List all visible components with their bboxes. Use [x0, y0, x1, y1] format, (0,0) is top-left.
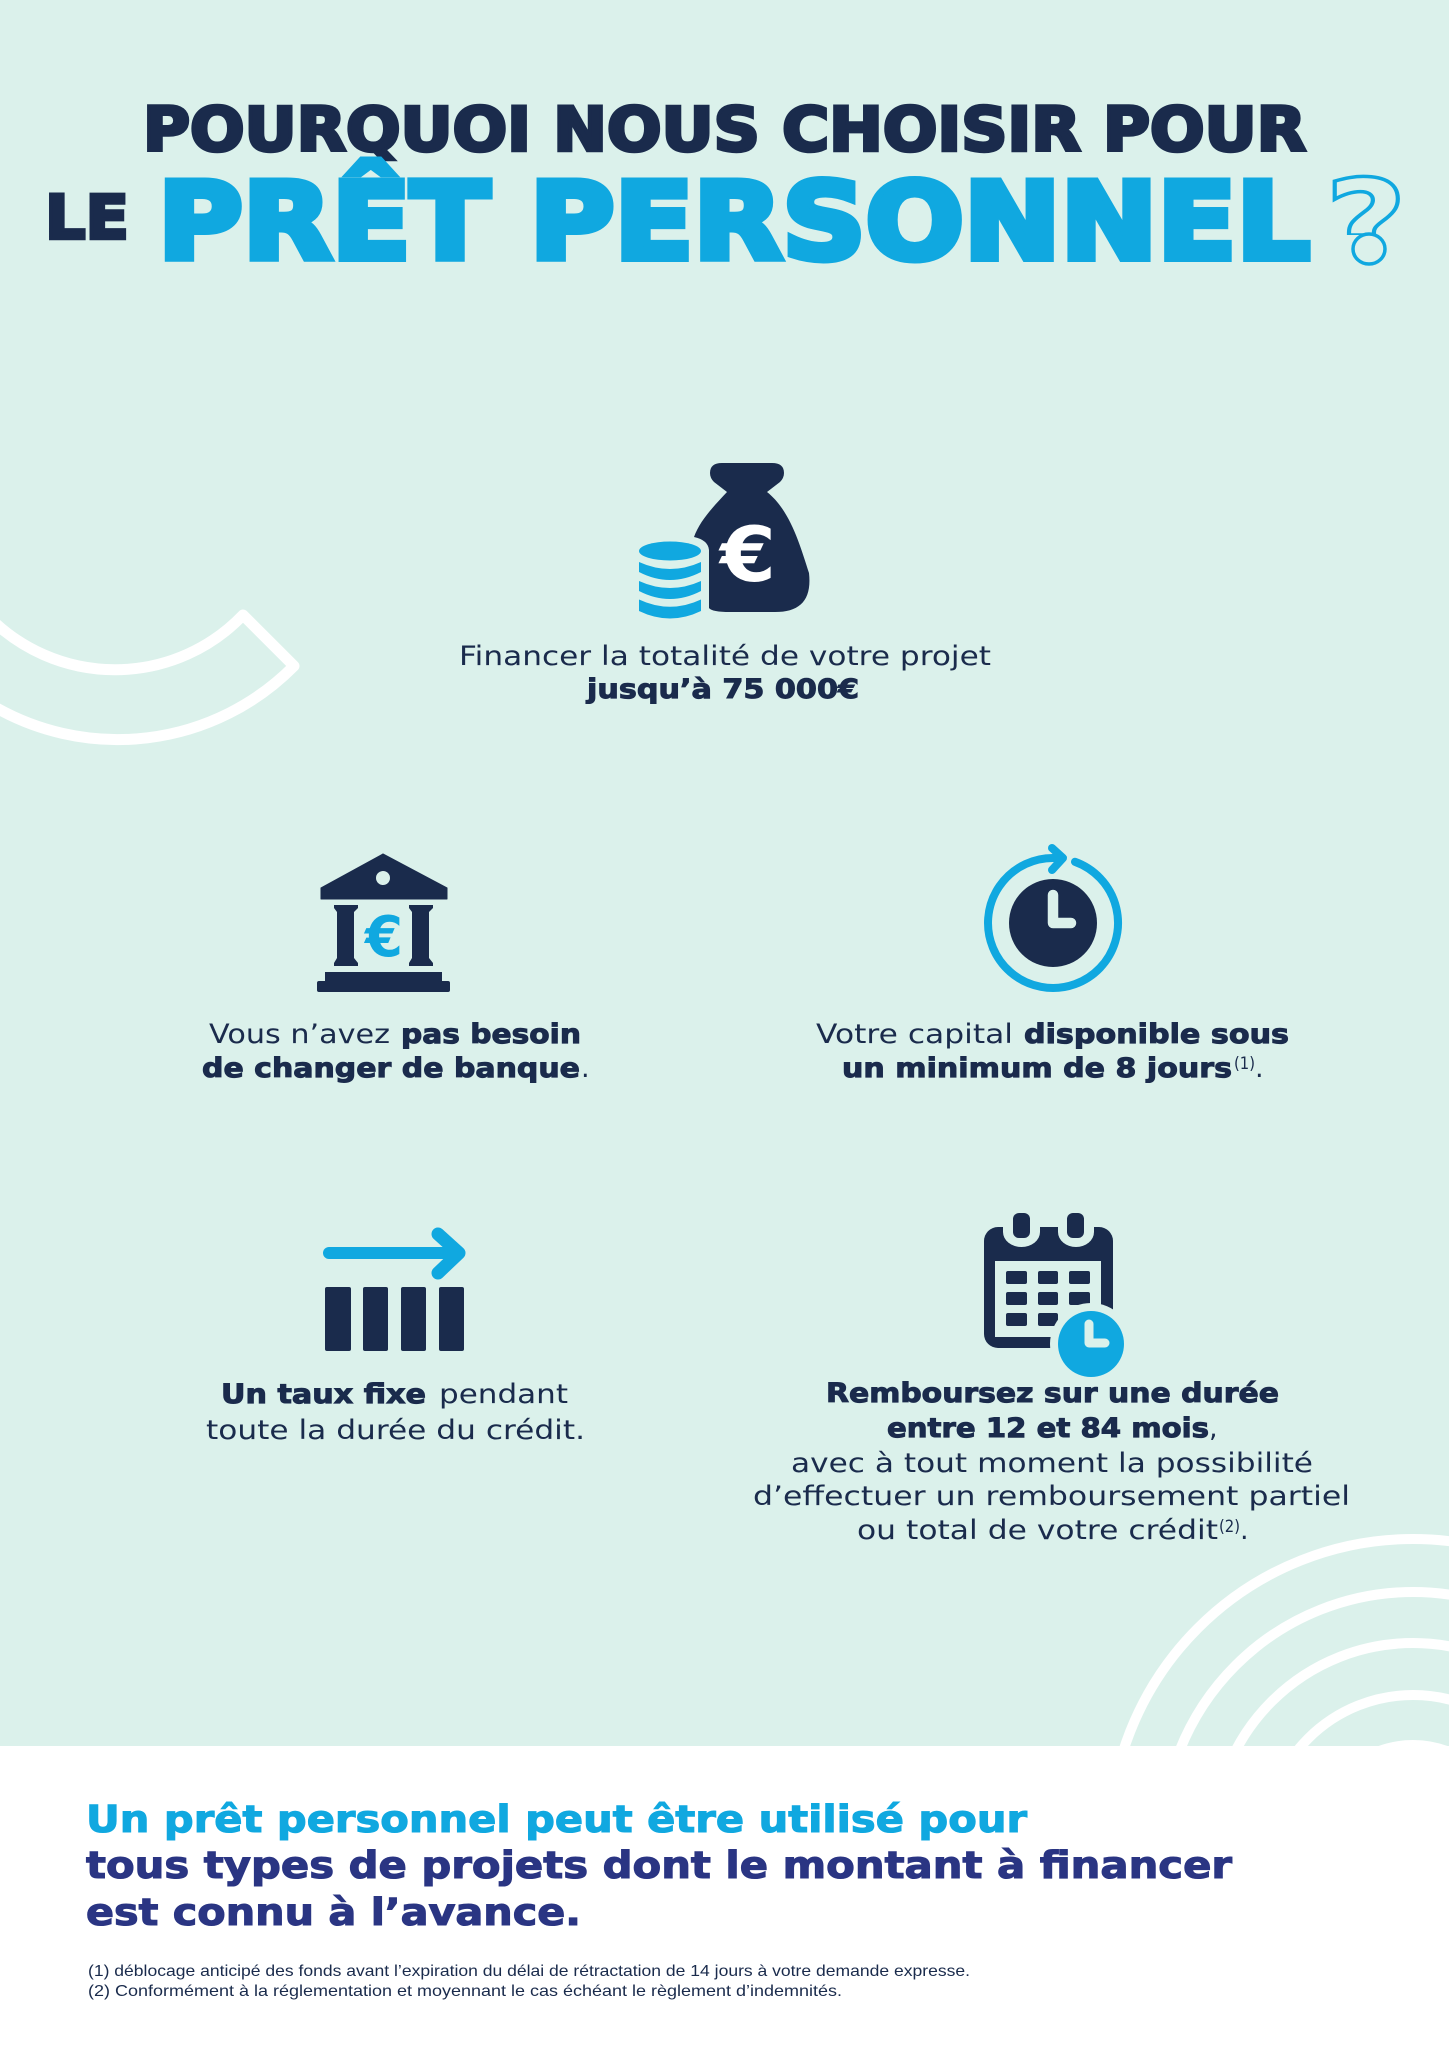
icon: money bag with coins: € [718, 510, 776, 599]
outlined question mark: ? [1325, 154, 1407, 292]
footnotes: (2) Conformément à la réglementation et moyennant le cas échéant le règlement d’indemnités. [88, 1983, 842, 2000]
icon: money bag with coins [639, 463, 809, 618]
panel: no need to change bank [202, 854, 590, 1084]
heading: projects statement [86, 1798, 1233, 1934]
text: repayment: Remboursez sur une durée [826, 1378, 1279, 1409]
text: capital: Votre capital [816, 1019, 1013, 1050]
panel: financing up to 75 000€ [459, 463, 991, 705]
heading: projects statement: tous types de projets dont le montant à financer [86, 1844, 1233, 1887]
title word: le: LE [45, 182, 129, 254]
decorative arc shape: top left [0, 615, 294, 740]
text: bank: de changer de banque [202, 1053, 580, 1084]
icon: arrow over bars [325, 1234, 464, 1351]
heading: projects statement: est connu à l’avance. [86, 1891, 581, 1934]
title [49, 104, 1400, 266]
text: repayment: ou total de votre crédit [857, 1515, 1218, 1546]
panel: repayment 12 to 84 months [753, 1213, 1350, 1546]
text: repayment: d’effectuer un remboursement partiel [753, 1481, 1350, 1512]
text: fixed rate: Un taux fixe [221, 1379, 426, 1410]
text: capital: (1) [1234, 1054, 1255, 1074]
text: capital: un minimum de 8 jours [842, 1053, 1232, 1084]
outlined question mark [1332, 174, 1400, 266]
title highlight: prêt personnel: PRÊT PERSONNEL [158, 160, 1310, 284]
icon: bank with euro [317, 854, 450, 992]
text: repayment: avec à tout moment la possibilité [791, 1448, 1313, 1479]
decorative concentric arcs: bottom right [1109, 1539, 1449, 2050]
text: bank: Vous n’avez [209, 1019, 390, 1050]
title line 1: POURQUOI NOUS CHOISIR POUR [143, 94, 1306, 166]
text: capital [816, 1019, 1289, 1084]
text: repayment: , [1209, 1413, 1218, 1444]
text: fixed rate: pendant [439, 1379, 568, 1410]
text: capital: disponible sous [1024, 1019, 1289, 1050]
panel: fixed rate [206, 1234, 585, 1446]
text: bank [202, 1019, 590, 1084]
footnotes: (1) déblocage anticipé des fonds avant l’expiration du délai de rétractation de 14 jours à votre demande expresse. [88, 1963, 970, 1980]
text: fixed rate: toute la durée du crédit. [206, 1415, 585, 1446]
text: bank: . [581, 1053, 590, 1084]
heading: projects statement: Un prêt personnel peut être utilisé pour [86, 1798, 1028, 1841]
panel: bottom white band [0, 1746, 1449, 2050]
text: repayment [753, 1378, 1350, 1546]
text: financing [459, 641, 991, 705]
icon: bank with euro: € [363, 905, 403, 970]
icon: clock with circular arrow [988, 848, 1118, 988]
icon: calendar with clock [984, 1213, 1132, 1385]
text: bank: pas besoin [401, 1019, 581, 1050]
text: financing: jusqu’à 75 000€ [586, 674, 859, 705]
footnotes [88, 1963, 970, 2000]
text: repayment: (2) [1219, 1517, 1240, 1537]
text: capital: . [1255, 1053, 1264, 1084]
text: repayment: entre 12 et 84 mois [887, 1413, 1209, 1444]
text: financing: Financer la totalité de votre projet [459, 641, 991, 672]
text: repayment: . [1240, 1515, 1249, 1546]
panel: capital available in 8 days [816, 848, 1289, 1084]
text: fixed rate [206, 1379, 585, 1446]
